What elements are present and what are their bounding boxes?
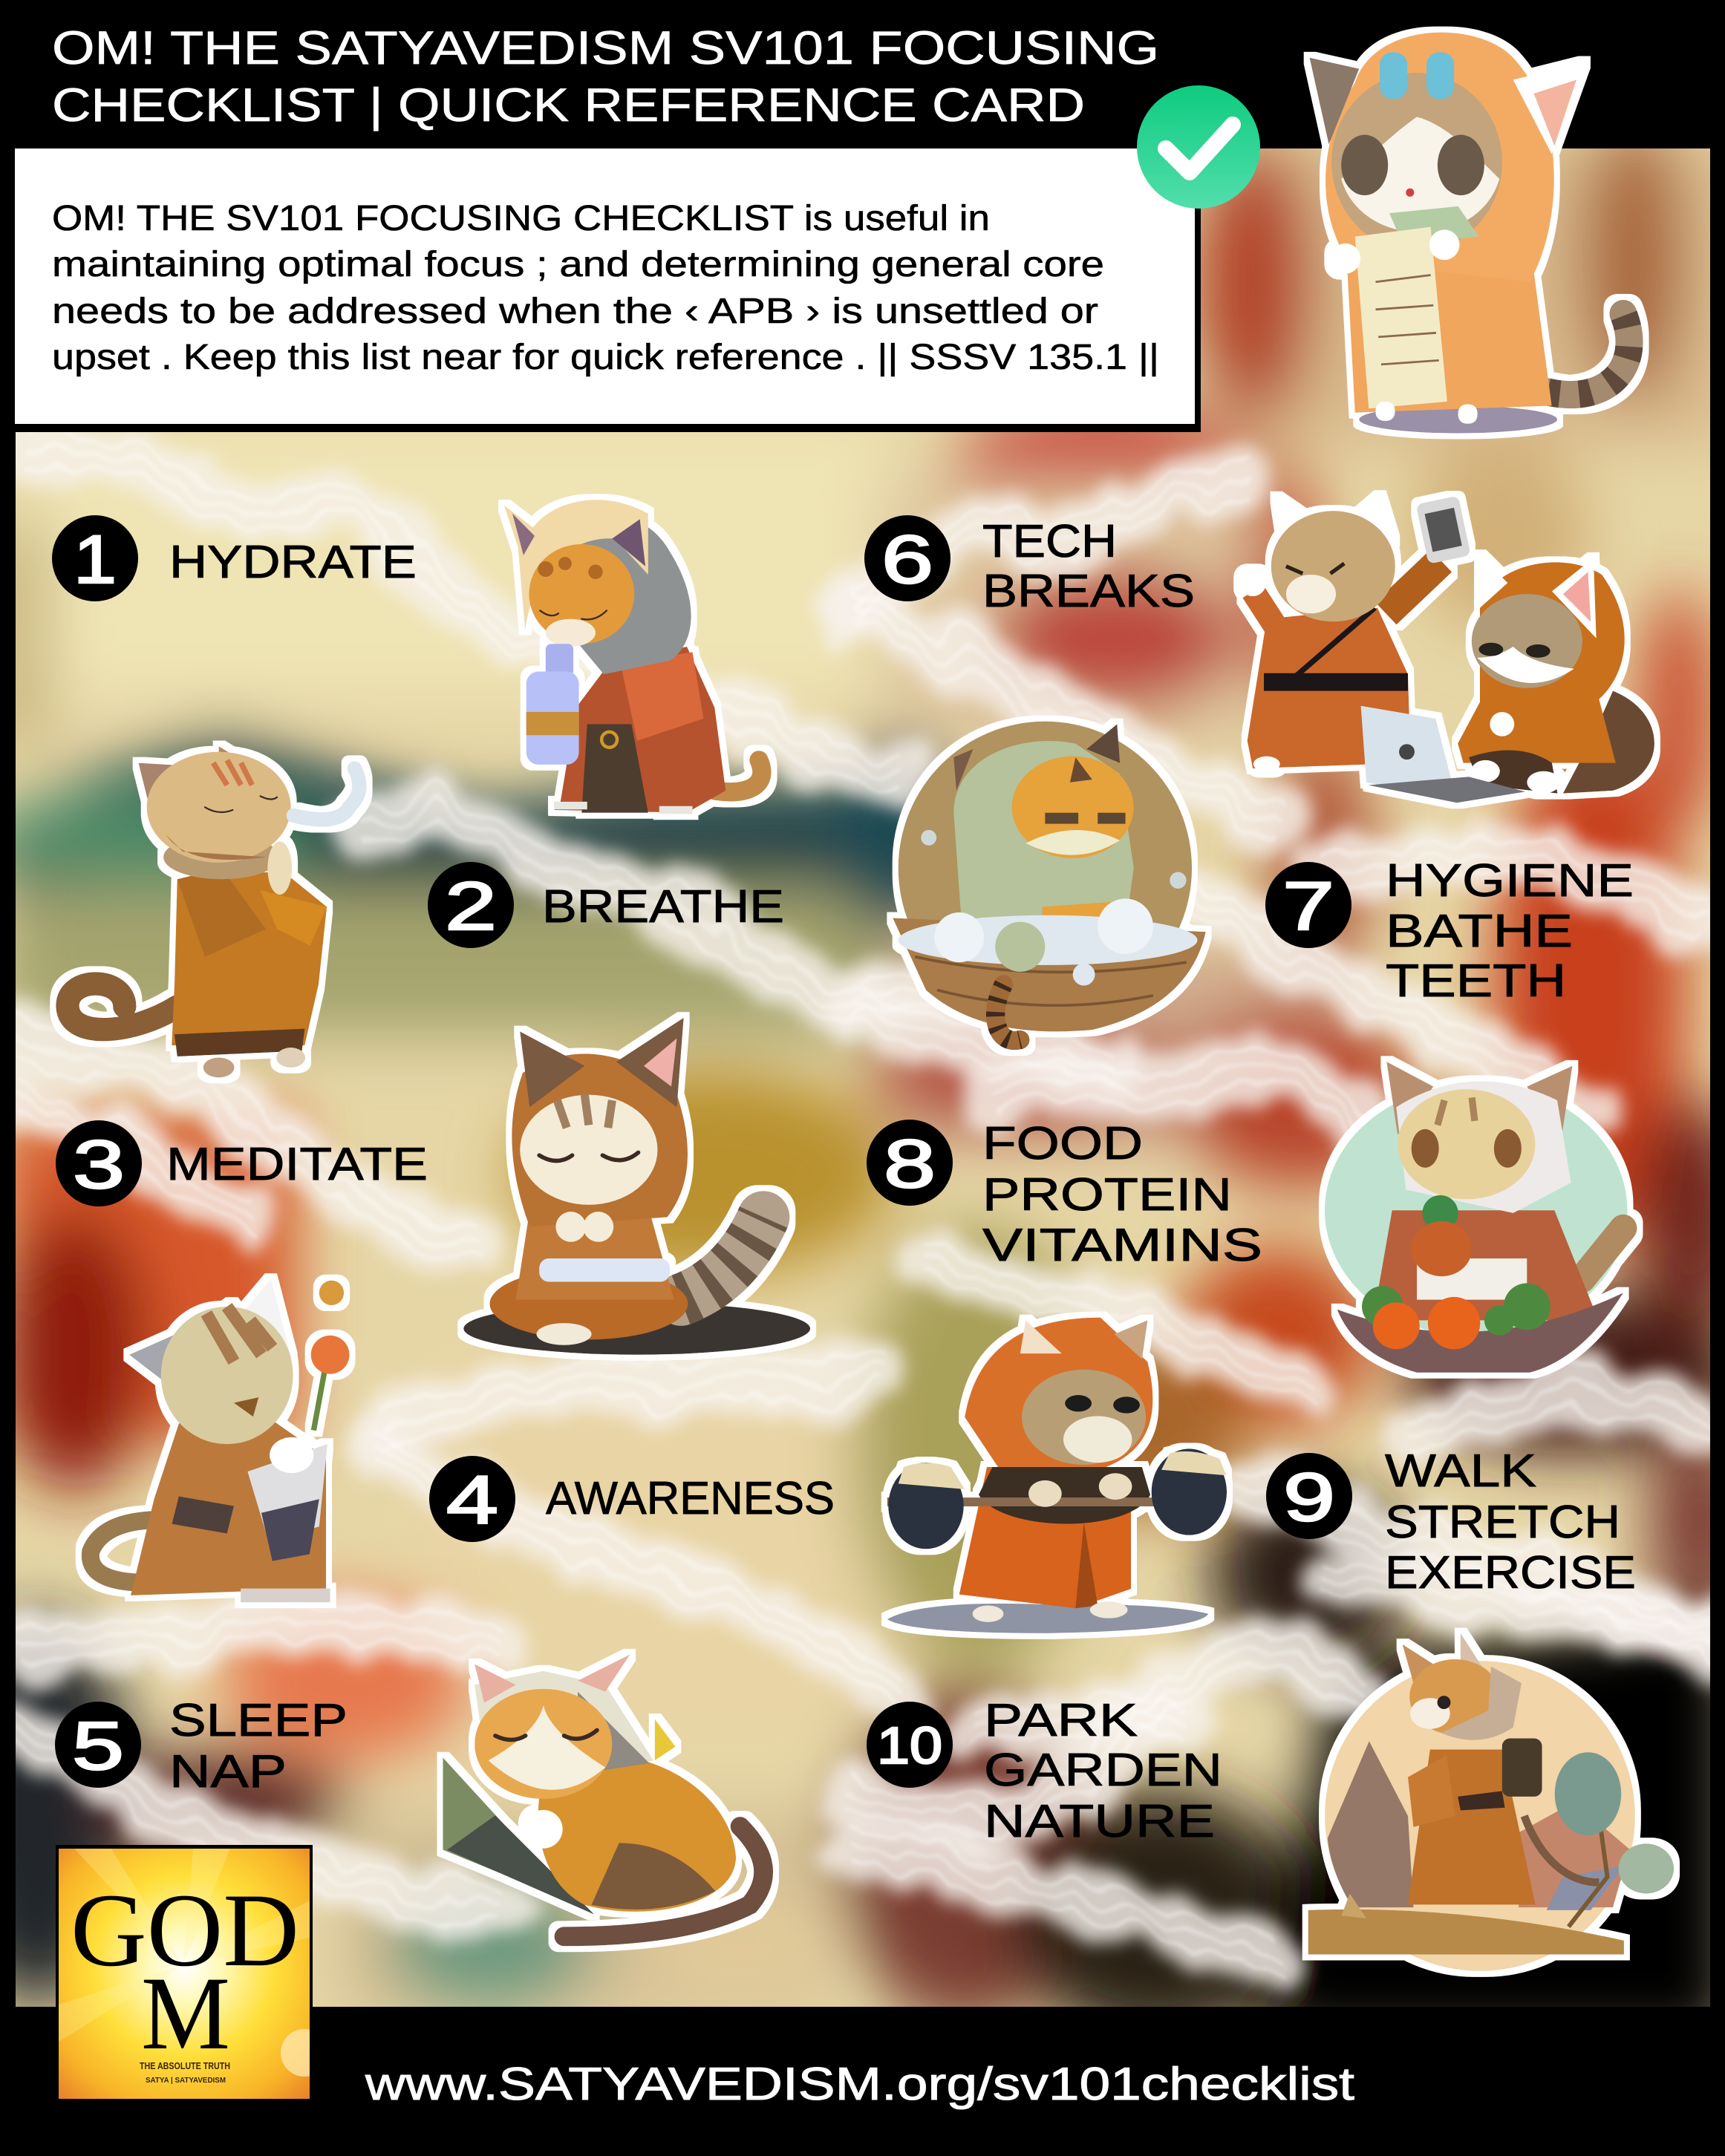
footer url: www.SATYAVEDISM.org/sv101checklist [365, 2059, 1354, 2110]
illustration: tech breaks cats [1239, 495, 1654, 803]
number badge 10: 10 [877, 1716, 942, 1774]
intro card [15, 148, 1201, 432]
illustration: weightlifting cat [887, 1318, 1227, 1633]
book cover: SATYA | SATYAVEDISM [146, 2077, 226, 2085]
label: awareness: AWARENESS [546, 1473, 835, 1524]
label: tech breaks [982, 516, 1195, 617]
label: hygiene bathe teeth: BATHE [1386, 906, 1573, 957]
number badge 6 [864, 515, 950, 601]
intro text: maintaining optimal focus ; and determining general core [52, 245, 1104, 284]
illustration: cat reading checklist [1310, 33, 1629, 434]
illustration: meditating cat [463, 1018, 810, 1355]
intro text: OM! THE SV101 FOCUSING CHECKLIST is useful in [52, 199, 990, 238]
number badge 8: 8 [884, 1126, 936, 1202]
title [52, 22, 1159, 131]
label: park garden nature: PARK [984, 1695, 1138, 1746]
label: sleep nap [169, 1695, 348, 1797]
number badge 2: 2 [445, 869, 497, 944]
illustration: sleeping cat [443, 1655, 763, 1936]
intro text [52, 199, 1159, 377]
illustration: hydrate cat [504, 500, 762, 814]
number badge 5 [55, 1702, 141, 1788]
number badge 3 [56, 1120, 142, 1206]
number badge 1 [52, 515, 138, 601]
label: hygiene bathe teeth [1386, 855, 1634, 1007]
label: food protein vitamins [982, 1118, 1262, 1271]
label: park garden nature [984, 1695, 1222, 1847]
book cover: GOD [71, 1872, 299, 1988]
illustration: cat with flower [91, 1279, 350, 1602]
number badge 3: 3 [73, 1127, 125, 1203]
label: hygiene bathe teeth: HYGIENE [1386, 855, 1634, 906]
label: walk stretch exercise: STRETCH [1385, 1497, 1620, 1548]
label: sleep nap: SLEEP [169, 1695, 348, 1746]
label: walk stretch exercise: WALK [1385, 1446, 1536, 1497]
book cover: THE ABSOLUTE TRUTH [140, 2060, 230, 2071]
number badge 2 [428, 862, 514, 948]
number badge 9 [1266, 1453, 1352, 1539]
label: breathe: BREATHE [542, 881, 784, 932]
number badge 4 [429, 1456, 515, 1542]
book cover: M [141, 1956, 230, 2071]
number badge 9: 9 [1283, 1460, 1335, 1535]
label: food protein vitamins: VITAMINS [982, 1220, 1262, 1271]
illustration: breathing cat [68, 746, 359, 1077]
illustration: bath cat [893, 722, 1206, 1041]
number badge 6: 6 [881, 522, 933, 598]
label: tech breaks: TECH [982, 516, 1117, 567]
label: park garden nature: NATURE [984, 1796, 1215, 1847]
intro text: upset . Keep this list near for quick reference . || SSSV 135.1 || [52, 338, 1159, 377]
number badge 8 [867, 1120, 953, 1206]
number badge 7 [1265, 862, 1351, 948]
label: hydrate: HYDRATE [169, 537, 417, 588]
number badge 4: 4 [446, 1463, 498, 1538]
icon: green check badge [1137, 85, 1260, 209]
label: tech breaks: BREAKS [982, 566, 1195, 617]
label: walk stretch exercise [1385, 1446, 1636, 1598]
number badge 7: 7 [1282, 869, 1334, 944]
illustration: walking cat in nature [1308, 1633, 1674, 1971]
label: sleep nap: NAP [169, 1746, 287, 1797]
number badge 5: 5 [72, 1708, 124, 1784]
book cover [56, 1845, 328, 2100]
illustration: food bowl cat [1325, 1062, 1628, 1373]
number badge 1: 1 [74, 522, 117, 598]
number badge 10 [867, 1702, 953, 1788]
title: CHECKLIST | QUICK REFERENCE CARD [52, 79, 1085, 131]
label: park garden nature: GARDEN [984, 1745, 1222, 1796]
title: OM! THE SATYAVEDISM SV101 FOCUSING [52, 22, 1159, 74]
label: food protein vitamins: PROTEIN [982, 1169, 1232, 1221]
label: hygiene bathe teeth: TEETH [1386, 956, 1566, 1007]
label: food protein vitamins: FOOD [982, 1118, 1143, 1169]
label: walk stretch exercise: EXERCISE [1385, 1547, 1636, 1598]
label: meditate: MEDITATE [166, 1139, 428, 1190]
intro text: needs to be addressed when the ‹ APB › is unsettled or [52, 292, 1098, 331]
